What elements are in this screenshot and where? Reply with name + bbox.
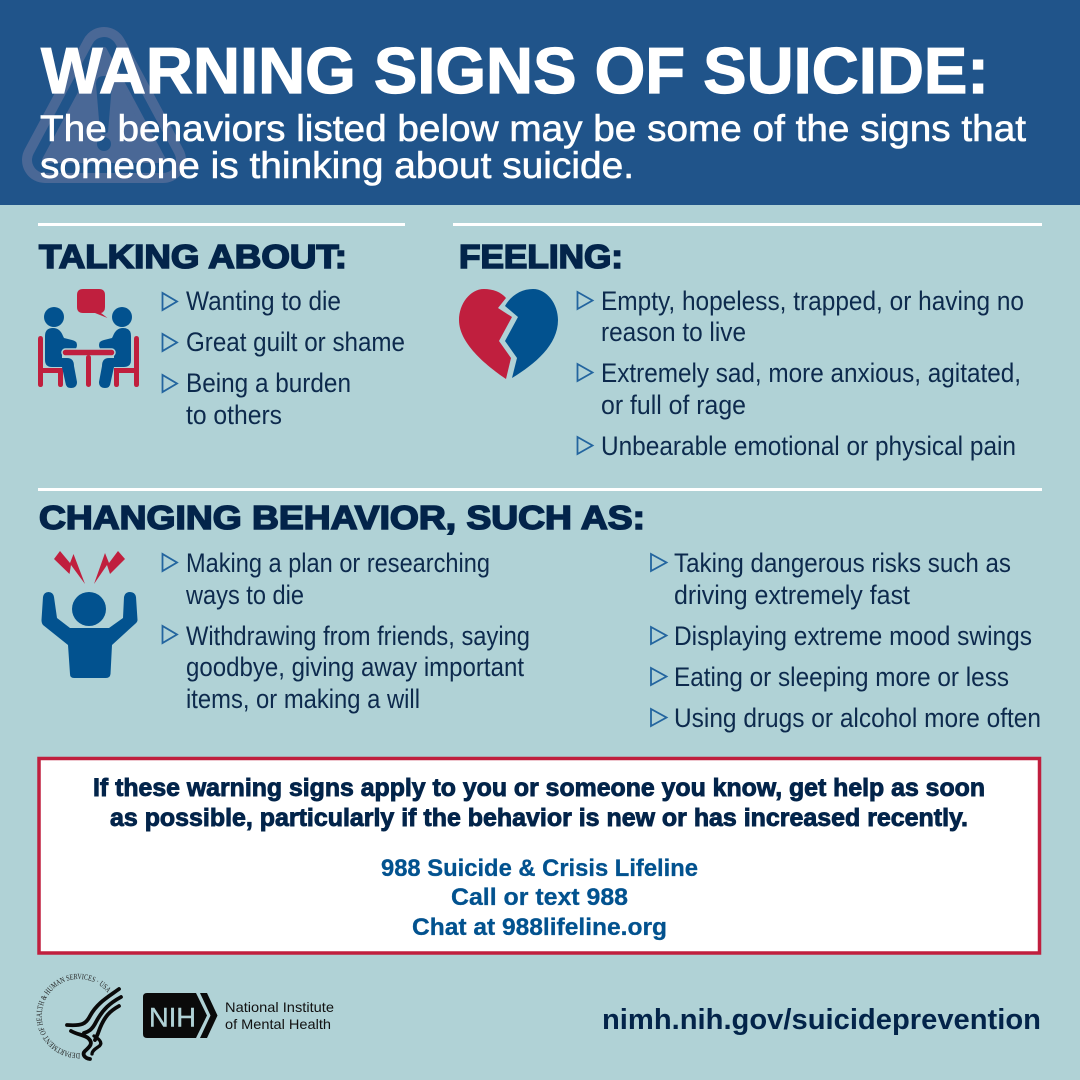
callout message: If these warning signs apply to you or someone you know, get help as soon — [93, 774, 985, 802]
crisis lifeline contact: Chat at 988lifeline.org — [412, 914, 667, 941]
website url: nimh.nih.gov/suicideprevention — [602, 1004, 1041, 1036]
list: feeling: or full of rage — [601, 390, 746, 420]
list: behavior, right column: Eating or sleeping more or less — [674, 662, 1009, 692]
logo: NIH: NIH — [149, 1002, 196, 1032]
panel: changing behavior — [39, 499, 1041, 733]
list: behavior, right column: Using drugs or alcohol more often — [674, 703, 1041, 733]
list: talking about: Great guilt or shame — [186, 327, 405, 357]
list: behavior, left column: ways to die — [185, 580, 304, 610]
panel: talking about — [38, 238, 405, 430]
list: behavior, left column: Withdrawing from friends, saying — [186, 621, 530, 651]
logo: NIH — [143, 993, 218, 1038]
logo text: National Institute of Mental Health — [225, 999, 334, 1032]
list: feeling: Empty, hopeless, trapped, or having no — [601, 286, 1024, 316]
list: feeling: reason to live — [601, 317, 746, 347]
list: behavior, left column: Making a plan or researching — [186, 548, 490, 578]
list: behavior, left column — [162, 548, 530, 714]
list: behavior, right column: driving extremely fast — [674, 580, 910, 610]
list: talking about: Being a burden — [186, 368, 351, 398]
list: feeling: Unbearable emotional or physical pain — [601, 431, 1016, 461]
subtitle — [40, 108, 1027, 186]
footer — [36, 974, 1041, 1061]
list: talking about: Wanting to die — [186, 286, 341, 316]
callout message — [93, 774, 985, 832]
crisis lifeline contact — [381, 855, 698, 941]
list: talking about — [162, 286, 405, 430]
list: talking about: to others — [186, 400, 282, 430]
logo text: National Institute of Mental Health: of Mental Health — [225, 1016, 331, 1032]
crisis lifeline contact: 988 Suicide & Crisis Lifeline — [381, 855, 698, 882]
list: feeling: Extremely sad, more anxious, agitated, — [601, 358, 1021, 388]
logo text: National Institute of Mental Health: National Institute — [225, 999, 334, 1015]
list: behavior, left column: items, or making a will — [186, 684, 420, 714]
panel: feeling — [459, 238, 1024, 461]
subtitle: someone is thinking about suicide. — [40, 145, 634, 186]
icon: two people talking at a table — [38, 289, 139, 388]
list: behavior, left column: goodbye, giving away important — [186, 652, 524, 682]
title: WARNING SIGNS OF SUICIDE: — [41, 34, 989, 107]
header banner — [0, 0, 1080, 205]
list: feeling — [578, 286, 1024, 461]
icon: warning triangle watermark — [45, 50, 163, 160]
crisis lifeline contact: Call or text 988 — [451, 884, 628, 911]
heading: talking about: TALKING ABOUT: — [39, 238, 347, 275]
list: behavior, right column: Displaying extreme mood swings — [674, 621, 1032, 651]
callout message: as possible, particularly if the behavior is new or has increased recently. — [110, 804, 968, 832]
logo: HHS seal: DEPARTMENT OF HEALTH & HUMAN SERVICES · USA — [36, 974, 110, 1058]
callout: get help box — [39, 758, 1040, 953]
icon: distressed person with lightning bolts — [42, 551, 138, 678]
icon: broken heart — [459, 289, 558, 379]
list: behavior, right column — [651, 548, 1041, 733]
list: behavior, right column: Taking dangerous risks such as — [674, 548, 1011, 578]
subtitle: The behaviors listed below may be some of the signs that — [40, 108, 1027, 149]
heading: changing behavior: CHANGING BEHAVIOR, SUCH AS: — [39, 499, 645, 536]
heading: feeling: FEELING: — [459, 238, 623, 275]
